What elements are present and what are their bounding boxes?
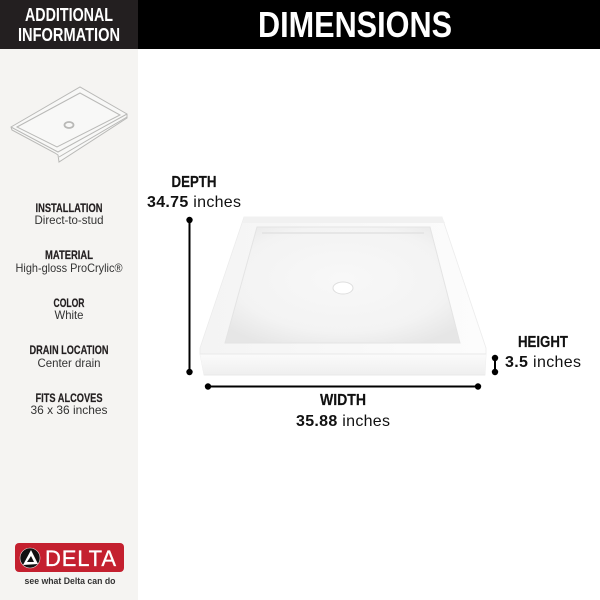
- sidebar header: [0, 0, 138, 49]
- spec: fits alcoves: [30, 391, 108, 417]
- width label: WIDTH: [320, 392, 366, 409]
- spec: fits alcoves: 36 x 36 inches: [30, 403, 108, 417]
- spec: material: High-gloss ProCrylic®: [16, 261, 123, 275]
- spec: color: [54, 296, 85, 322]
- spec: material: MATERIAL: [45, 248, 93, 262]
- sidebar header: ADDITIONAL: [25, 5, 113, 25]
- arrow: depth dimension: [186, 217, 193, 375]
- spec: installation: Direct-to-stud: [34, 213, 104, 227]
- spec: installation: INSTALLATION: [36, 201, 102, 215]
- depth label: 34.75 inches: [147, 194, 241, 211]
- spec: color: White: [54, 308, 84, 322]
- depth label: [147, 174, 241, 211]
- height label: [505, 334, 581, 371]
- logo: Delta: see what Delta can do: [24, 576, 116, 586]
- spec: drain location: DRAIN LOCATION: [30, 343, 108, 357]
- drain: [333, 282, 353, 294]
- arrow: height dimension: [492, 355, 498, 375]
- logo: Delta: [15, 543, 124, 586]
- sidebar panel: [0, 0, 138, 600]
- sidebar header: INFORMATION: [18, 25, 120, 45]
- spec: drain location: [30, 343, 108, 370]
- height label: HEIGHT: [518, 334, 568, 351]
- spec: color: COLOR: [54, 296, 85, 310]
- title bar: DIMENSIONS: [258, 4, 452, 45]
- spec: material: [16, 248, 123, 275]
- shower base product image: [200, 217, 486, 375]
- logo: Delta: DELTA: [45, 546, 116, 571]
- spec: installation: [34, 201, 104, 227]
- spec: drain location: Center drain: [38, 356, 100, 370]
- width label: 35.88 inches: [296, 413, 390, 430]
- title bar: [138, 0, 600, 49]
- height label: 3.5 inches: [505, 354, 581, 371]
- spec: fits alcoves: FITS ALCOVES: [36, 391, 102, 405]
- arrow: width dimension: [205, 383, 481, 390]
- depth label: DEPTH: [172, 174, 216, 191]
- width label: [296, 392, 390, 430]
- icon: shower base line drawing: [11, 87, 127, 162]
